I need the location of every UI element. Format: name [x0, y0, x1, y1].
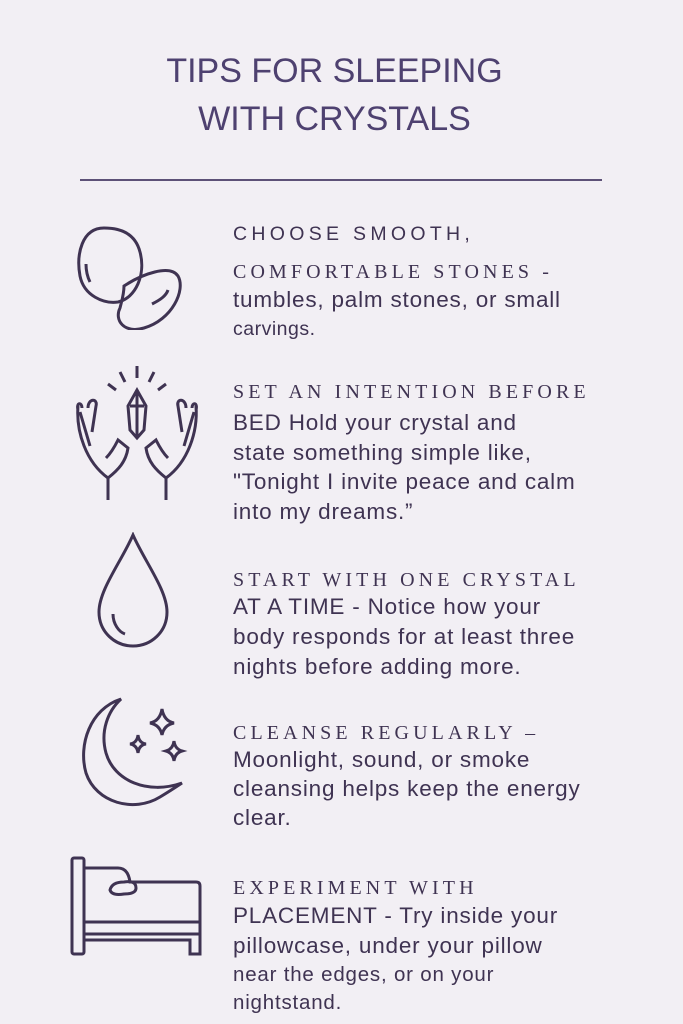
title [166, 52, 503, 138]
title: TIPS FOR SLEEPING [166, 52, 503, 90]
item 1: smooth stones [77, 223, 561, 340]
item 2: intention: into my dreams.” [233, 499, 413, 524]
icon: drop [98, 532, 168, 648]
item 5: placement: nightstand. [233, 991, 342, 1014]
item 3: one crystal: body responds for at least three [233, 624, 575, 649]
item 1: smooth stones: CHOOSE SMOOTH, [233, 223, 474, 245]
item 1: smooth stones: carvings. [233, 318, 316, 340]
icon: hands holding crystal [76, 366, 198, 500]
item 1: smooth stones: tumbles, palm stones, or small [233, 287, 561, 312]
item 4: cleanse: CLEANSE REGULARLY – [233, 722, 539, 744]
item 4: cleanse: cleansing helps keep the energy [233, 776, 581, 801]
icon: moon and stars [82, 698, 188, 806]
item 5: placement: near the edges, or on your [233, 963, 494, 986]
item 3: one crystal: nights before adding more. [233, 654, 521, 679]
item 3: one crystal: AT A TIME - Notice how your [233, 594, 541, 619]
title: WITH CRYSTALS [198, 100, 471, 138]
item 2: intention: state something simple like, [233, 440, 532, 465]
item 2: intention [76, 366, 590, 524]
item 2: intention: SET AN INTENTION BEFORE [233, 381, 590, 403]
item 2: intention: "Tonight I invite peace and calm [233, 469, 576, 494]
divider line [80, 179, 602, 181]
item 4: cleanse: clear. [233, 805, 292, 830]
item 3: one crystal [98, 532, 580, 679]
item 3: one crystal: START WITH ONE CRYSTAL [233, 569, 580, 591]
item 1: smooth stones: COMFORTABLE STONES - [233, 261, 553, 283]
item 4: cleanse: Moonlight, sound, or smoke [233, 747, 530, 772]
item 2: intention: BED Hold your crystal and [233, 410, 517, 435]
item 5: placement [70, 856, 558, 1014]
icon: stones [77, 226, 182, 330]
item 5: placement: PLACEMENT - Try inside your [233, 903, 558, 928]
item 5: placement: pillowcase, under your pillow [233, 933, 543, 958]
item 5: placement: EXPERIMENT WITH [233, 877, 478, 899]
icon: bed [70, 856, 202, 956]
item 4: cleanse [82, 698, 581, 830]
